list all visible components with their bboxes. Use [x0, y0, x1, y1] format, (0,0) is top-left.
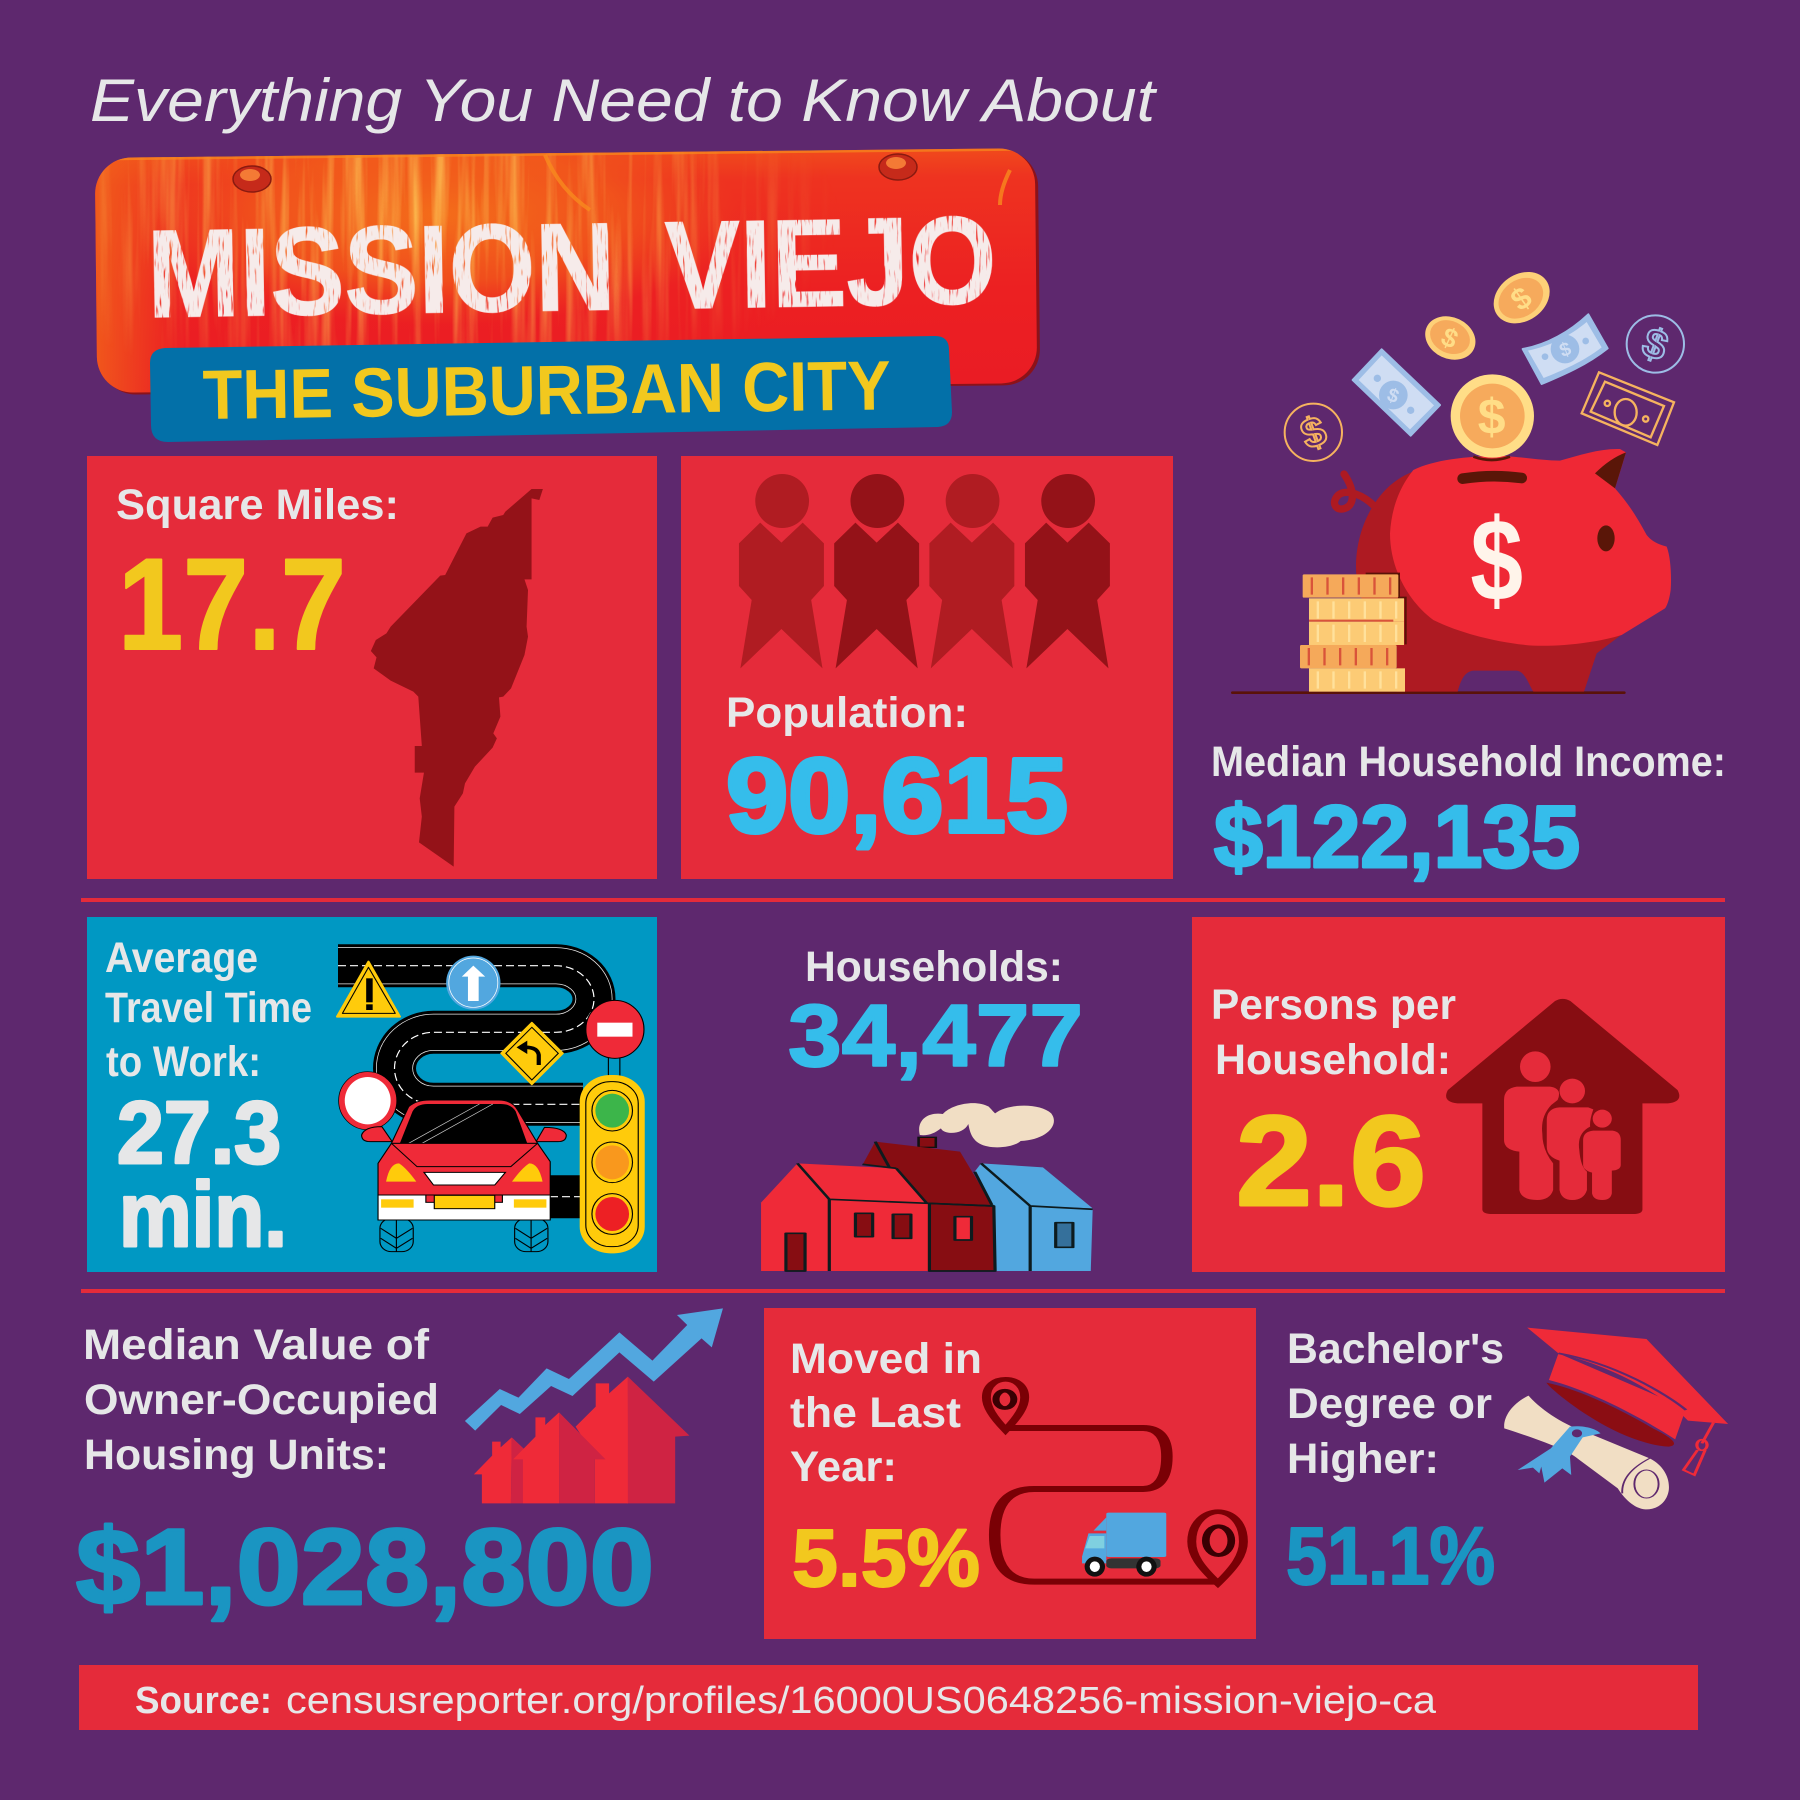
- icon: piggy bank with coins and bills: $: [1478, 389, 1506, 445]
- label: median value of owner-occupied housing units: Owner-Occupied: [84, 1376, 439, 1424]
- icon: piggy bank with coins and bills: $: [1557, 339, 1574, 362]
- icon: city map silhouette: [371, 489, 543, 867]
- label: households: Households:: [805, 943, 1063, 991]
- icon: sign nail left: [233, 166, 271, 192]
- source bar: censusreporter.org/profiles/16000US0648256-mission-viejo-ca: [286, 1680, 1437, 1722]
- panel: persons per household: [1192, 917, 1725, 1272]
- panel: travel time: [87, 917, 657, 1272]
- label: average travel time to work: Travel Time: [105, 984, 312, 1032]
- icon: sign nail right: [879, 154, 917, 180]
- panel: population: [681, 456, 1173, 879]
- icon: rising arrow over houses: [465, 1308, 723, 1503]
- sign title text: MISSION: [146, 198, 616, 344]
- label: bachelor's degree or higher: [1287, 1325, 1504, 1483]
- label: moved in the last year: the Last: [790, 1389, 961, 1437]
- value: 51.1%: 51.1%: [1286, 1511, 1495, 1602]
- label: average travel time to work: to Work:: [106, 1038, 261, 1086]
- icon: moving route with truck and pins: [986, 1379, 1243, 1583]
- source bar: [79, 1665, 1698, 1730]
- panel: square miles: [87, 456, 657, 879]
- icon: row of houses with smoke: [761, 1103, 1093, 1271]
- label: bachelor's degree or higher: Higher:: [1287, 1435, 1439, 1483]
- label: bachelor's degree or higher: Degree or: [1287, 1380, 1492, 1428]
- panel: bachelor's degree: [1286, 1325, 1728, 1602]
- icon: piggy bank with coins and bills: $: [1437, 321, 1463, 355]
- value: $1,028,800: $1,028,800: [76, 1506, 654, 1627]
- label: median household income: Median Household Income:: [1211, 738, 1726, 786]
- label: median value of owner-occupied housing units: Median Value of: [83, 1321, 430, 1369]
- label: median value of owner-occupied housing units: Housing Units:: [84, 1431, 389, 1479]
- value: 27.3 min.: min.: [119, 1164, 287, 1266]
- value: 90,615: 90,615: [726, 737, 1068, 855]
- icon: piggy bank with coins and bills: $: [1470, 495, 1523, 626]
- icon: piggy bank with coins and bills: $: [1636, 318, 1674, 370]
- value: 34,477: 34,477: [788, 986, 1083, 1085]
- icon: piggy bank with coins and bills: $: [1384, 385, 1402, 408]
- label: moved in the last year: [790, 1335, 982, 1491]
- icon: family in house: [1446, 999, 1679, 1214]
- value: $122,135: $122,135: [1214, 787, 1580, 886]
- icon: signs, car and traffic light: [337, 956, 645, 1253]
- icon: piggy bank with coins and bills: [1232, 261, 1684, 693]
- icon: piggy bank with coins and bills: $: [1294, 406, 1332, 458]
- header sign: Mission Viejo: [90, 140, 1040, 400]
- label: bachelor's degree or higher: Bachelor's: [1287, 1325, 1504, 1373]
- label: population: Population:: [726, 689, 968, 737]
- label: persons per household: [1211, 981, 1456, 1084]
- label: moved in the last year: Year:: [790, 1443, 897, 1491]
- value: 27.3 min.: [117, 1083, 287, 1266]
- value: 5.5%: 5.5%: [792, 1513, 980, 1604]
- label: persons per household: Household:: [1215, 1036, 1451, 1084]
- icon: piggy bank with coins and bills: $: [1505, 280, 1538, 318]
- source bar: Source:: [135, 1680, 272, 1722]
- panel: moved in the last year: [764, 1308, 1256, 1639]
- sign title text: [146, 192, 997, 344]
- label: persons per household: Persons per: [1211, 981, 1456, 1029]
- icon: row of four people: [739, 474, 1110, 668]
- value: 27.3 min.: 27.3: [117, 1083, 281, 1182]
- panel: median home value: [76, 1308, 723, 1627]
- label: square miles: Square Miles:: [116, 481, 399, 529]
- label: average travel time to work: Average: [105, 934, 258, 982]
- banner: the suburban city: THE SUBURBAN CITY: [202, 346, 891, 434]
- label: moved in the last year: Moved in: [790, 1335, 982, 1383]
- icon: graduation cap and diploma: [1504, 1328, 1728, 1509]
- icon: winding road: [338, 966, 594, 1197]
- value: 2.6: 2.6: [1236, 1090, 1426, 1233]
- value: 17.7: 17.7: [118, 531, 346, 677]
- label: average travel time to work: [105, 934, 312, 1086]
- title: everything you need to know: Everything You Need to Know About: [90, 67, 1158, 134]
- sign title text: VIEJO: [664, 192, 997, 335]
- panel: households: [761, 943, 1093, 1271]
- label: median value of owner-occupied housing units: [83, 1321, 439, 1479]
